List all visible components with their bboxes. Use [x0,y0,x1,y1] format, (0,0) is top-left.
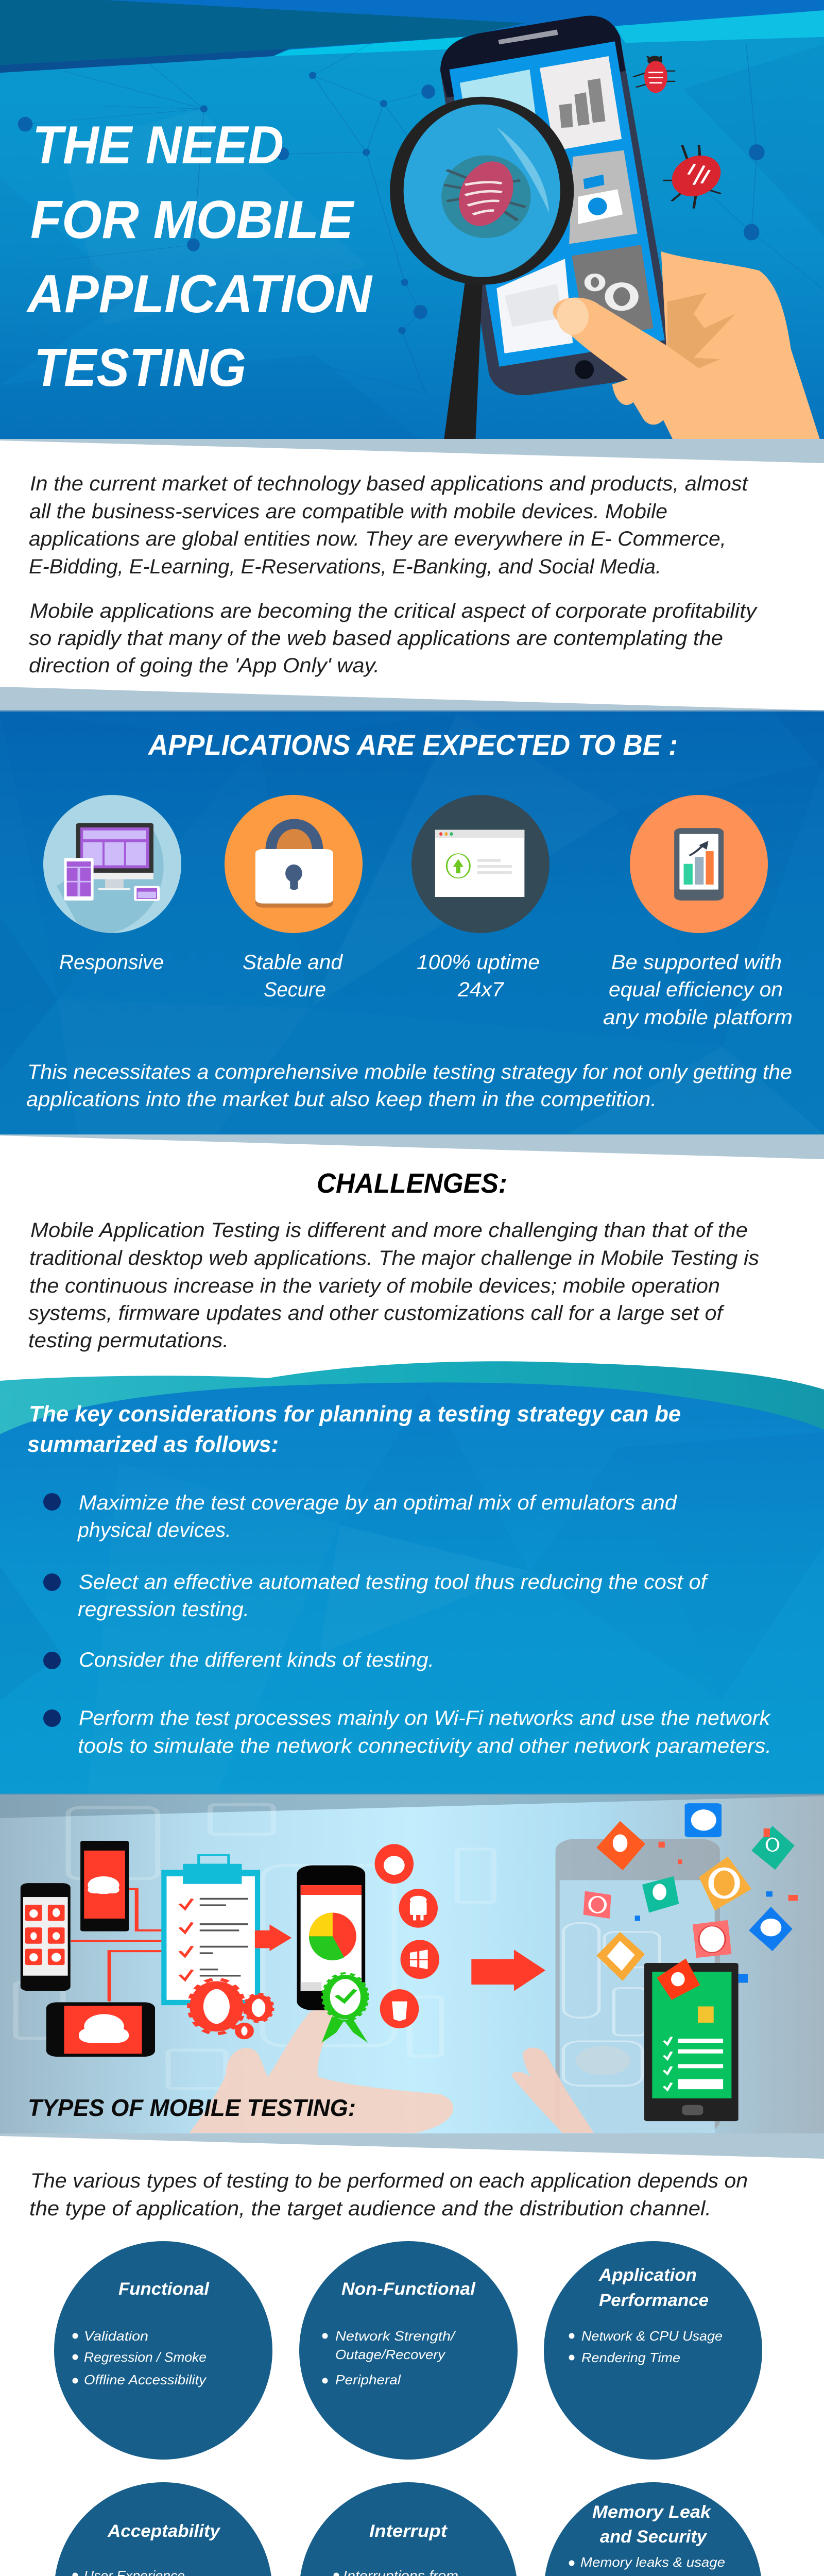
text: necessitates: This necessitates a comprehensive mobile testing strategy for not only getting the [27,1061,792,1083]
challenges text [28,1219,759,1352]
hero banner [0,0,824,439]
hand: right [512,2048,594,2133]
title [26,115,373,398]
challenges text: traditional desktop web applications. The major challenge in Mobile Testing is [29,1247,759,1269]
circle: functional: Validation [84,2328,148,2344]
intro text: so rapidly that many of the web based applications are contemplating the [29,627,723,650]
ghost phone [556,1839,720,2133]
types intro text: The various types of testing to be performed on each application depends on [30,2170,748,2192]
circle: non-functional: Network Strength/ [335,2328,456,2344]
circle: memory leak and security: and Security [600,2527,708,2547]
circle: memory leak and security: Memory leaks & usage [580,2554,725,2570]
label: equal efficiency: equal efficiency on [609,978,783,1001]
heading: types of mobile testing: TYPES OF MOBILE TESTING: [28,2094,356,2121]
big arrow [471,1950,545,1991]
circle: interrupt: Interrupt [369,2521,448,2541]
label: stable and secure [243,951,344,1001]
title: THE NEED [32,115,284,175]
text: necessitates [26,1061,792,1111]
circle: acceptability: Acceptability [107,2521,221,2541]
label: stable and secure: Stable and [243,951,344,974]
icon: hand holding phone [553,251,820,439]
icon: responsive devices [43,795,181,933]
circle: interrupt [299,2482,518,2576]
challenges text: testing permutations. [28,1329,229,1352]
title: TESTING [34,338,246,398]
hero artwork [0,0,824,439]
icon: gears [190,1979,273,2038]
challenges text: the continuous increase in the variety of mobile devices; mobile operation [29,1275,720,1297]
title: APPLICATION [26,264,373,324]
heading: challenges: CHALLENGES: [317,1168,507,1199]
app icons floating [583,1803,798,2000]
label: equal efficiency: any mobile platform [603,1006,793,1029]
phone: pie chart [297,1866,365,2010]
icon: large bug [663,145,727,209]
phone: cloud portrait [80,1841,129,1931]
arrow [255,1924,291,1951]
intro text: E-Bidding, E-Learning, E-Reservations, E-Banking, and Social Media. [29,555,661,578]
icon: clipboard checklist [161,1855,260,2005]
circle: acceptability [54,2482,272,2576]
icon: magnifying glass with bug [397,100,567,439]
bullet: test coverage [43,1492,678,1541]
bullet: test coverage: physical devices. [77,1519,231,1541]
label: uptime: 100% uptime [417,951,540,974]
heading: key considerations: summarized as follows: [27,1432,279,1457]
circle: application performance: Network & CPU Usage [581,2328,723,2344]
bullet: automated tool [43,1571,709,1621]
phone: six tile [21,1883,71,1991]
bullet: kinds of testing: Consider the different kinds of testing. [79,1649,434,1671]
icon: html5 [380,1989,419,2028]
heading: key considerations [27,1401,681,1457]
heading: applications expected: APPLICATIONS ARE EXPECTED TO BE : [147,728,678,761]
phone: green checklist [644,1963,739,2121]
circle: functional: Functional [118,2279,210,2299]
types intro text: the type of application, the target audience and the distribution channel. [29,2197,711,2220]
icon: padlock [225,795,363,933]
circle: application performance [544,2241,762,2460]
bullet: automated tool: regression testing. [78,1598,249,1621]
intro text [29,472,758,677]
phone: cloud landscape [46,2002,155,2057]
hand: left [189,2010,453,2133]
circle: non-functional [299,2241,518,2460]
panel: applications are expected to be [0,710,824,1134]
intro text: In the current market of technology based applications and products, almost [30,472,749,495]
panel: key considerations [0,1361,824,1793]
title: FOR MOBILE [30,190,355,250]
icon: apple [375,1844,414,1884]
bullet: automated tool: Select an effective automated testing tool thus reducing the cost of [79,1571,709,1594]
heading: key considerations: The key considerations for planning a testing strategy can be [29,1401,681,1427]
intro text: direction of going the 'App Only' way. [29,654,380,677]
circle: application performance: Rendering Time [581,2350,680,2365]
label: equal efficiency: Be supported with [611,951,782,974]
challenges text: Mobile Application Testing is different and more challenging than that of the [30,1219,748,1242]
icon: phone with growth chart [630,795,768,933]
circle: memory leak and security: Memory Leak [592,2502,712,2522]
challenges text: systems, firmware updates and other customizations call for a large set of [28,1302,725,1325]
bullet: wi-fi networks [43,1707,771,1757]
circle: application performance: Performance [599,2291,709,2310]
intro text: Mobile applications are becoming the critical aspect of corporate profitability [30,600,758,622]
icon: android [399,1889,438,1928]
circle: application performance: Application [598,2265,697,2285]
circle: functional: Regression / Smoke [84,2349,207,2365]
label: uptime [417,951,540,1001]
text: necessitates: applications into the market but also keep them in the competition. [26,1088,657,1111]
icon: uptime browser window [411,795,550,933]
bullet: test coverage: Maximize the test coverage by an optimal mix of emulators and [79,1492,678,1514]
label: uptime: 24x7 [457,978,505,1001]
bullet: wi-fi networks: Perform the test processes mainly on Wi-Fi networks and use the network [79,1707,771,1730]
icon: approval badge [321,1973,368,2043]
circle: functional [54,2241,272,2460]
icon: windows [401,1940,439,1979]
circle: non-functional: Outage/Recovery [335,2347,446,2362]
icon: phone [440,16,674,395]
label: responsive: Responsive [59,951,164,974]
circle: non-functional: Non-Functional [341,2279,476,2299]
circle: non-functional: Peripheral [335,2372,401,2387]
types intro text [29,2170,748,2220]
circle: functional: Offline Accessibility [84,2372,207,2387]
intro text: all the business-services are compatible with mobile devices. Mobile [29,500,667,523]
intro text: applications are global entities now. They are everywhere in E- Commerce, [29,528,726,550]
label: equal efficiency [603,951,793,1029]
circle: memory leak and security [544,2482,762,2576]
bullet: wi-fi networks: tools to simulate the network connectivity and other network parameters. [78,1735,771,1757]
icon: small bug [633,56,675,93]
panel: types of mobile testing illustration [0,1793,824,2133]
label: stable and secure: Secure [264,978,326,1001]
